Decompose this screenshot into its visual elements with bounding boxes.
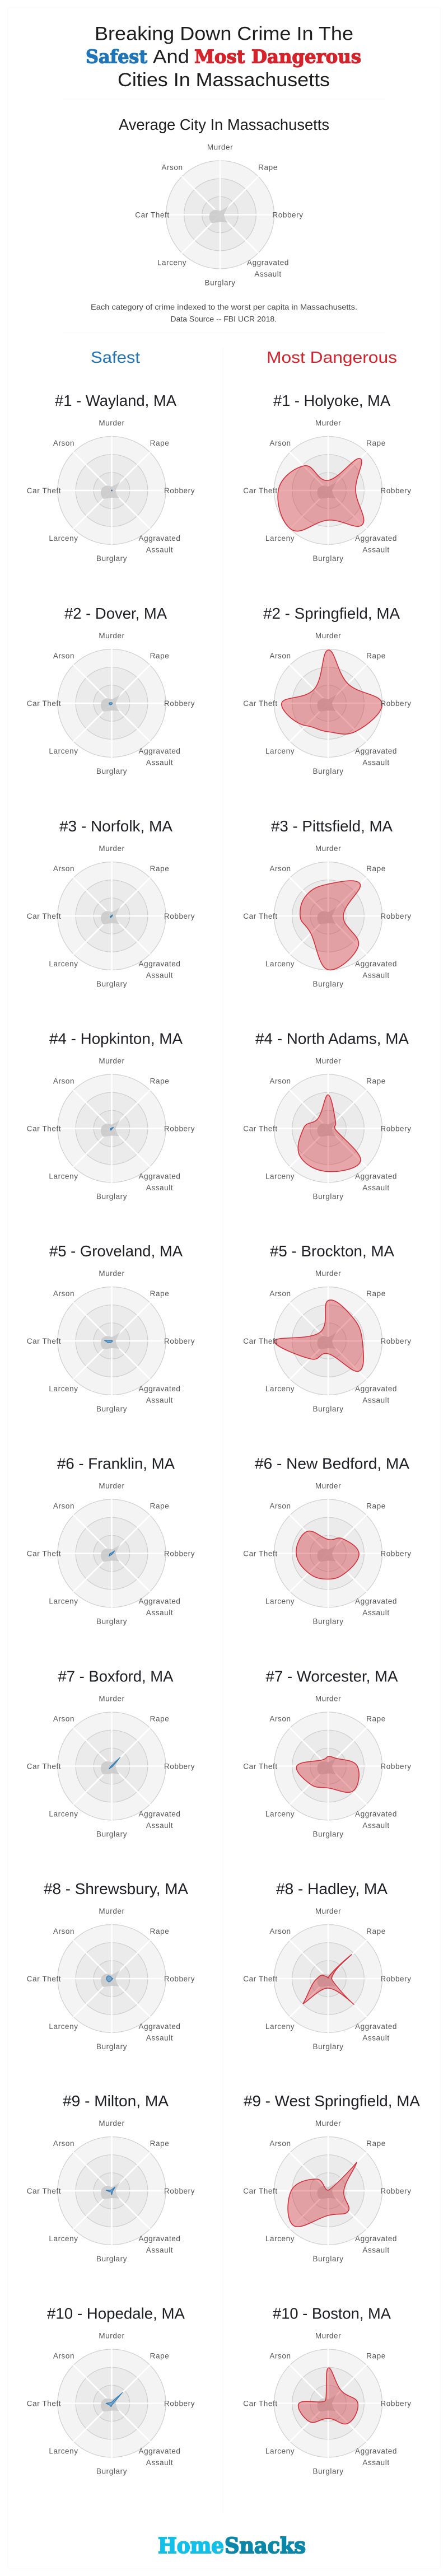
radar chart: Rape	[366, 864, 386, 873]
heading: #8 - Shrewsbury, MA	[44, 1880, 189, 1897]
radar chart: Arson	[269, 1927, 291, 1935]
heading: #6 - New Bedford, MA	[255, 1455, 410, 1472]
radar chart: Aggravated	[138, 1172, 181, 1180]
heading: #10 - Boston, MA	[273, 2304, 391, 2322]
radar chart: Robbery	[164, 1550, 195, 1558]
radar chart: Larceny	[265, 747, 295, 755]
radar chart: Assault	[146, 2458, 173, 2467]
radar chart: Larceny	[49, 1172, 78, 1180]
data source note: Each category of crime indexed to the worst per capita in Massachusetts.	[91, 303, 357, 311]
radar chart: Rape	[150, 2351, 169, 2360]
radar chart: Burglary	[96, 1405, 127, 1413]
heading: #7 - Boxford, MA	[58, 1667, 174, 1685]
radar chart: Murder	[99, 2331, 125, 2340]
radar chart: Rape	[366, 439, 386, 447]
title: Breaking Down Crime In The	[95, 24, 353, 45]
panel: #2 Dover	[27, 605, 195, 775]
title: Cities In Massachusetts	[118, 69, 330, 91]
radar chart: Rape	[366, 1502, 386, 1511]
panel: #6 New Bedford	[243, 1455, 412, 1626]
radar chart: Larceny	[49, 747, 78, 755]
radar chart: Arson	[269, 2351, 291, 2360]
radar chart: Aggravated	[355, 960, 397, 968]
radar chart: Assault	[146, 1184, 173, 1192]
radar chart: Rape	[150, 1714, 169, 1723]
radar chart: Larceny	[265, 2234, 295, 2243]
radar chart: Rape	[366, 1714, 386, 1723]
radar chart	[27, 632, 195, 775]
radar chart: Arson	[53, 2351, 74, 2360]
title: Most Dangerous	[194, 46, 361, 67]
radar chart: Robbery	[380, 2187, 412, 2195]
radar chart: Car Theft	[243, 1124, 278, 1133]
radar chart: Rape	[150, 2139, 169, 2148]
radar chart: average city: Larceny	[157, 259, 186, 267]
radar chart: Car Theft	[243, 1337, 278, 1345]
heading: #7 - Worcester, MA	[265, 1667, 398, 1685]
radar chart: Robbery	[164, 1762, 195, 1770]
radar chart: Aggravated	[355, 534, 397, 543]
radar chart: Car Theft	[27, 2187, 61, 2195]
radar chart: Burglary	[312, 767, 344, 775]
panel: #10 Boston	[243, 2304, 412, 2476]
radar chart: Aggravated	[355, 2022, 397, 2031]
radar chart: Rape	[366, 2139, 386, 2148]
radar chart: Aggravated	[138, 2447, 181, 2456]
radar chart	[27, 844, 195, 988]
radar chart: Larceny	[265, 1172, 295, 1180]
heading: #2 - Springfield, MA	[263, 605, 400, 622]
radar chart: Car Theft	[243, 1550, 278, 1558]
radar chart: Burglary	[312, 1830, 344, 1839]
radar chart: Rape	[150, 1077, 169, 1085]
radar chart: Arson	[269, 1502, 291, 1511]
radar chart: Assault	[146, 758, 173, 767]
radar chart: Aggravated	[138, 1597, 181, 1606]
radar chart: Aggravated	[138, 2022, 181, 2031]
radar chart: Burglary	[96, 767, 127, 775]
radar chart: Murder	[99, 1694, 125, 1703]
radar chart: Murder	[315, 1907, 341, 1915]
heading: #4 - North Adams, MA	[255, 1030, 409, 1047]
radar chart: Assault	[146, 2033, 173, 2042]
radar chart: Larceny	[49, 534, 78, 543]
panel: #9 Milton	[27, 2092, 195, 2263]
radar chart: Burglary	[96, 554, 127, 563]
panel: #1 Wayland	[27, 392, 195, 563]
radar chart	[27, 1481, 195, 1626]
radar chart	[243, 1481, 412, 1626]
radar chart: Assault	[362, 2246, 390, 2254]
radar chart: Arson	[269, 864, 291, 873]
radar chart: Arson	[53, 864, 74, 873]
heading: #5 - Groveland, MA	[49, 1242, 183, 1260]
radar chart: Murder	[315, 1269, 341, 1278]
radar chart: Burglary	[312, 2042, 344, 2051]
radar chart: Assault	[362, 758, 390, 767]
radar chart: Murder	[99, 1269, 125, 1278]
radar chart: Murder	[315, 1481, 341, 1490]
radar chart: Robbery	[164, 1337, 195, 1345]
radar chart: Car Theft	[243, 912, 278, 920]
radar chart: Car Theft	[243, 1975, 278, 1983]
heading: #1 - Wayland, MA	[55, 392, 177, 409]
radar chart: Car Theft	[243, 2187, 278, 2195]
panel: #3 Pittsfield	[243, 817, 412, 988]
title: Safest	[86, 46, 148, 67]
radar chart: Burglary	[312, 1617, 344, 1626]
radar chart: Larceny	[49, 960, 78, 968]
radar chart	[27, 1694, 195, 1839]
radar chart	[243, 1694, 412, 1839]
radar chart	[243, 844, 412, 988]
radar chart: Arson	[53, 1714, 74, 1723]
radar chart: Murder	[99, 2119, 125, 2128]
radar chart: Burglary	[96, 1830, 127, 1839]
column heading: most dangerous: Most Dangerous	[267, 349, 397, 367]
radar chart: Robbery	[380, 1550, 412, 1558]
radar chart: average city	[135, 143, 304, 287]
radar chart: Robbery	[380, 1337, 412, 1345]
radar chart: Aggravated	[138, 1385, 181, 1393]
radar chart: Aggravated	[138, 1810, 181, 1818]
heading: average city: Average City In Massachusetts	[119, 116, 329, 133]
panel: #7 Boxford	[27, 1667, 195, 1839]
radar chart	[243, 1057, 412, 1200]
radar chart: Assault	[146, 545, 173, 554]
radar chart: Larceny	[265, 1597, 295, 1606]
radar chart: Aggravated	[355, 1597, 397, 1606]
radar chart: Robbery	[380, 2400, 412, 2407]
heading: #10 - Hopedale, MA	[47, 2304, 185, 2322]
radar chart: Larceny	[265, 2022, 295, 2031]
radar chart: Assault	[362, 1821, 390, 1830]
radar chart: Robbery	[380, 1762, 412, 1770]
radar chart: Rape	[150, 439, 169, 447]
heading: #3 - Pittsfield, MA	[271, 817, 393, 835]
radar chart: Rape	[150, 1502, 169, 1511]
radar chart: Burglary	[96, 1193, 127, 1200]
panel: #6 Franklin	[27, 1455, 195, 1626]
radar chart: Rape	[150, 1927, 169, 1935]
radar chart: average city: Arson	[161, 163, 183, 171]
heading: #1 - Holyoke, MA	[273, 392, 391, 409]
radar chart: Rape	[366, 1077, 386, 1085]
radar chart: Aggravated	[138, 2234, 181, 2243]
radar chart: average city: Assault	[254, 270, 282, 278]
radar chart	[243, 1907, 412, 2051]
radar chart: Burglary	[312, 980, 344, 988]
panel: #4 Hopkinton	[27, 1030, 195, 1200]
radar chart: Assault	[362, 2033, 390, 2042]
heading: #9 - Milton, MA	[63, 2092, 169, 2110]
radar chart: Murder	[315, 632, 341, 640]
data source note: Data Source -- FBI UCR 2018.	[170, 315, 277, 324]
radar chart: Burglary	[96, 1617, 127, 1626]
radar chart: Arson	[269, 2139, 291, 2148]
radar chart: Larceny	[265, 960, 295, 968]
radar chart: Robbery	[380, 1975, 412, 1983]
radar chart: Larceny	[49, 1597, 78, 1606]
radar chart	[27, 419, 195, 563]
radar chart: Robbery	[164, 699, 195, 708]
panel: #5 Brockton	[243, 1242, 412, 1413]
radar chart: Murder	[99, 419, 125, 427]
radar chart: Aggravated	[355, 2234, 397, 2243]
radar chart: Arson	[269, 1714, 291, 1723]
radar chart: Car Theft	[243, 1762, 278, 1770]
column heading: safest: Safest	[91, 349, 140, 367]
radar chart: Assault	[362, 545, 390, 554]
radar chart: Arson	[269, 439, 291, 447]
panel: #10 Hopedale	[27, 2304, 195, 2476]
radar chart: Assault	[362, 971, 390, 980]
radar chart: Burglary	[312, 2255, 344, 2263]
panel: #8 Hadley	[243, 1880, 412, 2051]
radar chart: Car Theft	[27, 1762, 61, 1770]
radar chart	[27, 2119, 195, 2263]
radar chart: Robbery	[380, 912, 412, 920]
panel: #2 Springfield	[243, 605, 412, 775]
radar chart: Burglary	[96, 2255, 127, 2263]
radar chart: Car Theft	[27, 1337, 61, 1345]
radar chart	[27, 1269, 195, 1413]
radar chart: Arson	[53, 2139, 74, 2148]
radar chart: average city: Rape	[258, 163, 278, 171]
heading: #2 - Dover, MA	[64, 605, 167, 622]
radar chart: Robbery	[380, 1124, 412, 1133]
title: And	[153, 46, 189, 67]
radar chart: Murder	[99, 1907, 125, 1915]
logo: HomeSnacks	[158, 2533, 306, 2558]
radar chart: Assault	[362, 1184, 390, 1192]
radar chart: Rape	[366, 652, 386, 660]
radar chart: Rape	[150, 1289, 169, 1298]
logo: HomeSnacks: Snacks	[225, 2533, 306, 2558]
title	[86, 24, 361, 91]
radar chart: Rape	[366, 1927, 386, 1935]
radar chart: Murder	[315, 419, 341, 427]
radar chart: Murder	[315, 2331, 341, 2340]
radar chart: Burglary	[96, 980, 127, 988]
radar chart: Assault	[362, 1396, 390, 1404]
radar chart: Murder	[315, 1694, 341, 1703]
radar chart: Murder	[99, 844, 125, 853]
radar chart: Robbery	[164, 2400, 195, 2407]
radar chart: Larceny	[265, 1810, 295, 1818]
radar chart: Car Theft	[27, 487, 61, 495]
panel: #8 Shrewsbury	[27, 1880, 195, 2051]
heading: #9 - West Springfield, MA	[244, 2092, 421, 2110]
radar chart: Assault	[146, 1396, 173, 1404]
radar chart: Car Theft	[27, 2400, 61, 2407]
data source note	[91, 303, 357, 324]
radar chart	[243, 632, 412, 775]
panel: #5 Groveland	[27, 1242, 195, 1413]
radar chart: Robbery	[164, 1124, 195, 1133]
radar chart	[27, 2331, 195, 2476]
radar chart: Assault	[146, 1609, 173, 1617]
radar chart: average city: Car Theft	[135, 211, 170, 219]
radar chart: Aggravated	[355, 1385, 397, 1393]
radar chart: Car Theft	[27, 1975, 61, 1983]
radar chart: Arson	[53, 439, 74, 447]
radar chart: Aggravated	[138, 747, 181, 755]
radar chart: Aggravated	[355, 1172, 397, 1180]
panel: #1 Holyoke	[243, 392, 412, 563]
radar chart: average city: Murder	[207, 143, 233, 151]
radar chart: Burglary	[312, 1193, 344, 1200]
heading: #6 - Franklin, MA	[57, 1455, 175, 1472]
radar chart: Assault	[362, 2458, 390, 2467]
radar chart: Larceny	[49, 2447, 78, 2456]
radar chart: Arson	[53, 1927, 74, 1935]
radar chart	[27, 1907, 195, 2051]
radar chart: Rape	[366, 1289, 386, 1298]
radar chart: Robbery	[164, 487, 195, 495]
panel: #7 Worcester	[243, 1667, 412, 1839]
radar chart: Larceny	[49, 1385, 78, 1393]
radar chart: Arson	[53, 1077, 74, 1085]
radar chart: Burglary	[312, 2467, 344, 2476]
radar chart: Robbery	[164, 912, 195, 920]
radar chart: Burglary	[96, 2467, 127, 2476]
radar chart: Larceny	[265, 534, 295, 543]
heading: #4 - Hopkinton, MA	[49, 1030, 183, 1047]
radar chart: average city: Robbery	[272, 211, 304, 219]
radar chart: Car Theft	[27, 699, 61, 708]
radar chart: Car Theft	[27, 1550, 61, 1558]
radar chart: Larceny	[265, 1385, 295, 1393]
radar chart: Murder	[315, 2119, 341, 2128]
radar chart: Murder	[99, 1057, 125, 1065]
radar chart: average city: Aggravated	[247, 259, 289, 267]
radar chart: Murder	[99, 632, 125, 640]
heading: #5 - Brockton, MA	[270, 1242, 395, 1260]
heading: #3 - Norfolk, MA	[59, 817, 173, 835]
radar chart: Robbery	[164, 1975, 195, 1983]
radar chart: Robbery	[164, 2187, 195, 2195]
radar chart: Aggravated	[355, 747, 397, 755]
radar chart: Rape	[150, 652, 169, 660]
radar chart: Rape	[150, 864, 169, 873]
radar chart: Assault	[146, 2246, 173, 2254]
radar chart: Aggravated	[355, 2447, 397, 2456]
radar chart	[243, 419, 412, 563]
radar chart: Aggravated	[138, 534, 181, 543]
radar chart	[27, 1057, 195, 1200]
heading: #8 - Hadley, MA	[276, 1880, 388, 1897]
radar chart: Assault	[146, 971, 173, 980]
radar chart: Rape	[366, 2351, 386, 2360]
radar chart: Burglary	[312, 1405, 344, 1413]
radar chart: Arson	[53, 1289, 74, 1298]
radar chart: Car Theft	[27, 1124, 61, 1133]
radar chart: Larceny	[49, 2022, 78, 2031]
radar chart: Arson	[269, 1077, 291, 1085]
radar chart: Car Theft	[243, 2400, 278, 2407]
radar chart: Robbery	[380, 699, 412, 708]
radar chart: Car Theft	[27, 912, 61, 920]
radar chart	[243, 1269, 412, 1413]
panel: #3 Norfolk	[27, 817, 195, 988]
radar chart: Arson	[53, 652, 74, 660]
logo: HomeSnacks: Home	[158, 2533, 224, 2558]
radar chart: Arson	[269, 652, 291, 660]
radar chart: Robbery	[380, 487, 412, 495]
radar chart: Assault	[146, 1821, 173, 1830]
radar chart: Larceny	[49, 1810, 78, 1818]
radar chart: average city: Burglary	[204, 279, 236, 287]
radar chart: Car Theft	[243, 699, 278, 708]
radar chart: Burglary	[312, 554, 344, 563]
radar chart: Car Theft	[243, 487, 278, 495]
radar chart: Arson	[269, 1289, 291, 1298]
radar chart: Murder	[315, 1057, 341, 1065]
panel: #9 West Springfield	[243, 2092, 421, 2263]
radar chart: Murder	[99, 1481, 125, 1490]
panel: #4 North Adams	[243, 1030, 412, 1200]
radar chart: Larceny	[49, 2234, 78, 2243]
radar chart: Assault	[362, 1609, 390, 1617]
radar chart: Larceny	[265, 2447, 295, 2456]
radar chart	[243, 2331, 412, 2476]
radar chart: Aggravated	[355, 1810, 397, 1818]
radar chart: Burglary	[96, 2042, 127, 2051]
radar chart: Aggravated	[138, 960, 181, 968]
radar chart: Murder	[315, 844, 341, 853]
radar chart	[243, 2119, 412, 2263]
radar chart: Arson	[53, 1502, 74, 1511]
